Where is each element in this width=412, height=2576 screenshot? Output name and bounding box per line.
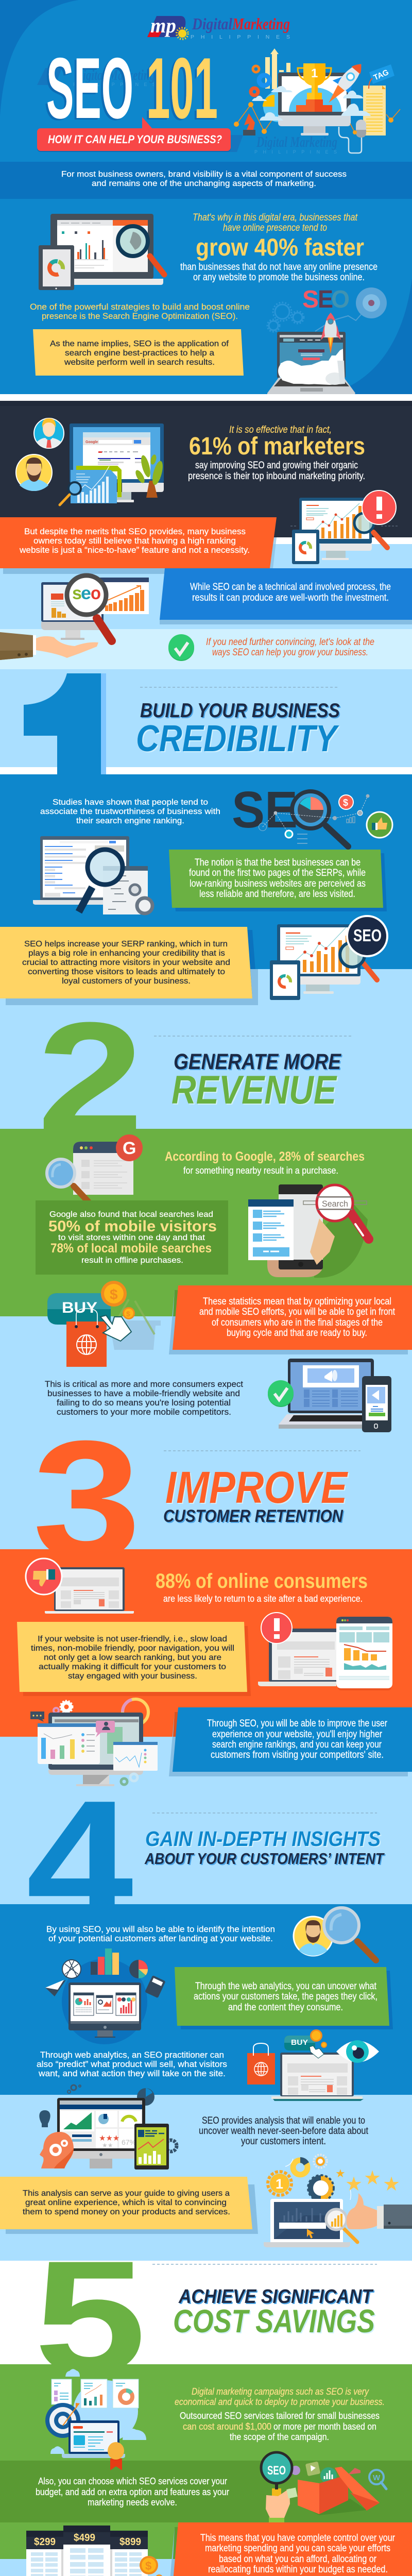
logo: Digital Marketing Philippines: mp — [150, 14, 176, 37]
number 1: 1 — [56, 674, 101, 777]
text block: digital marketing campaigns: economical and quick to deploy to promote your business. — [175, 2397, 385, 2407]
illustration: phone search with hand — [248, 1184, 369, 1278]
illustration: rocket launching from laptop: O — [331, 286, 350, 313]
number 1 — [24, 673, 106, 778]
text block: critical mobile-friendly: customers to your more mobile competitors. — [57, 1407, 231, 1417]
panel: dark green mobile stats: 50% of mobile visitors — [48, 1218, 217, 1235]
illustration: hero monitor with trophy and rocket — [234, 48, 400, 153]
text block: predict: also “predict” what product will sell, what visitors — [37, 2059, 227, 2069]
text block: critical mobile-friendly: failing to do so means you're losing potential — [57, 1398, 231, 1408]
text block: digital marketing campaigns: or more per month based on — [273, 2421, 376, 2432]
illustration: monitor with alert — [290, 490, 398, 564]
illustration: laptop and report card — [258, 1613, 392, 1690]
panel: green notion: found on the first two pages of the SERPs, while — [189, 868, 366, 878]
number 3: 3 — [32, 1406, 141, 1594]
heading: gain in-depth insights — [144, 1813, 385, 1868]
text: 101 — [146, 40, 218, 137]
panel: dark section 61% of marketers — [0, 401, 412, 537]
text block: 61% of marketers: say improving SEO and growing their organic — [195, 460, 358, 471]
illustration: SEO magnifier: SE — [232, 781, 298, 839]
panel: blue technical process: results it can produce are well-worth the investment. — [192, 592, 389, 603]
panel: yellow serp ranking — [0, 927, 258, 1005]
panel: blue through SEO — [169, 1707, 412, 1776]
illustration: pricing tables with coins — [26, 2526, 163, 2576]
illustration: dashboard monitor — [30, 1699, 158, 1786]
panel: yellow serp ranking: loyal customers of your business. — [62, 977, 191, 986]
callout: as the name implies — [33, 329, 244, 376]
icon: blonde avatar — [34, 418, 64, 448]
heading: improve customer retention: IMPROVE — [165, 1463, 349, 1513]
illustration: laptop with tablet and magnifier — [39, 214, 164, 290]
panel: section 2 green — [0, 1129, 412, 1435]
panel: dark green mobile stats: Google also found that local searches lead — [49, 1210, 213, 1219]
text block: grow 40% faster: grow 40% faster — [196, 233, 364, 261]
illustration: hero monitor with trophy and rocket: TAG — [372, 68, 390, 82]
illustration: analytics monitor — [45, 1948, 166, 2044]
panel: light blue background — [0, 537, 412, 767]
text block: SEO provides analysis: uncover wealth never-seen-before data about — [199, 2126, 369, 2137]
text block: predict: Through web analytics, an SEO practitioner can — [40, 2050, 224, 2060]
text block: digital marketing campaigns: can cost around $1,000 — [183, 2421, 271, 2432]
panel: intro band: and remains one of the unchanging aspects of marketing. — [92, 179, 316, 188]
panel: section 4 blue — [0, 1904, 412, 2261]
heading: build your business credibility: CREDIBILITY — [136, 718, 339, 759]
panel: section 3 orange — [0, 1549, 412, 1904]
text block: 88% of online consumers: 88% of online consumers — [156, 1570, 368, 1592]
text block: studies have shown: Studies have shown that people tend to — [53, 798, 208, 807]
callout: further convincing with check — [168, 634, 374, 661]
illustration: dashboard with head and tablet: 67% — [122, 2138, 136, 2146]
text block: grow 40% faster — [180, 212, 377, 283]
heading: improve customer retention — [163, 1451, 360, 1526]
logo: Digital Marketing Philippines — [147, 14, 290, 40]
text block: SEO provides analysis: your customers intent. — [241, 2136, 326, 2147]
illustration: rating gears and thumbs up: 1 — [276, 2176, 283, 2192]
panel: yellow guide: them to spend money on your products and services. — [23, 2208, 230, 2216]
illustration: rocket launching from laptop — [267, 286, 387, 394]
logo: Digital Marketing Philippines: Marketing — [232, 14, 290, 33]
text block: identify the intention — [46, 1924, 275, 1943]
illustration: SEO magnifier: $ — [343, 798, 348, 808]
heading: achieve significant cost savings: ACHIEVE SIGNIFICANT — [178, 2286, 373, 2308]
heading: build your business credibility — [136, 687, 340, 759]
text block: identify the intention: of your potential customers after landing at your website. — [48, 1934, 273, 1943]
text block: studies have shown: associate the trustworthiness of business with — [40, 807, 220, 816]
text block: choose services: budget, and add on extra option and features as your — [36, 2487, 229, 2497]
panel: intro band: For most business owners, brand visibility is a vital component of success — [61, 170, 347, 179]
panel: blue through SEO: customers from visiting your competitors' site. — [211, 1750, 384, 1760]
text block: grow 40% faster: than businesses that do not have any online presence — [180, 262, 377, 273]
watermark logo faint: Digital Marketing — [75, 67, 155, 83]
text block: digital marketing campaigns: Outsourced SEO services tailored for small businesses — [180, 2411, 380, 2421]
illustration: buy button with bag: $ — [110, 1286, 118, 1302]
heading: build your business credibility: BUILD YOUR BUSINESS — [140, 700, 340, 722]
number 5: 5 — [34, 2228, 146, 2408]
heading: generate more revenue: GENERATE MORE — [174, 1049, 341, 1074]
text block: 88% of online consumers — [156, 1570, 368, 1604]
text block: 28% of searches — [165, 1149, 365, 1176]
illustration: dashboard with head and tablet: ★★★ — [99, 2134, 119, 2143]
text block: 28% of searches: According to Google, 28% of searches — [165, 1149, 365, 1164]
panel: hero background — [0, 0, 412, 394]
panel: yellow not user-friendly: times, non-mobile friendly, poor navigation, you will — [31, 1644, 234, 1653]
panel: blue through SEO: experience on your website, you'll enjoy higher — [212, 1729, 383, 1740]
text block: 28% of searches: for something nearby result in a purchase. — [183, 1165, 338, 1176]
illustration: reports, target and laptop — [45, 2369, 146, 2470]
panel: yellow not user-friendly — [17, 1622, 251, 1696]
illustration: G browser with magnifier — [47, 1134, 143, 1201]
panel: orange complete control: based on what you can afford, allocating or — [219, 2554, 377, 2565]
panel: green notion: The notion is that the best businesses can be — [195, 857, 360, 868]
illustration: rocket launching from laptop: E — [318, 286, 333, 313]
panel: green web analytics: and the content they consume. — [228, 2002, 343, 2013]
illustration: hand with seo magnifier: s — [72, 583, 82, 603]
panel: yellow serp ranking: plays a big role in enhancing your credibility that is — [28, 949, 225, 958]
panel: yellow guide: great online experience, which is vital to convincing — [25, 2198, 227, 2207]
text block: 61% of marketers: It is so effective that in fact, — [229, 425, 332, 435]
panel: blue technical process — [160, 568, 412, 624]
panel: dark green mobile stats: to visit stores within one day and that — [58, 1233, 205, 1242]
illustration: gift box of SEO icons: W — [373, 2473, 381, 2482]
heading: generate more revenue: REVENUE — [171, 1067, 337, 1112]
text block: critical mobile-friendly — [45, 1379, 243, 1417]
panel: green notion — [169, 850, 387, 911]
illustration: pricing tables with coins: $499 — [74, 2532, 95, 2544]
illustration: buy button with bag: BUY — [62, 1299, 97, 1316]
illustration: pricing tables with coins: $ — [145, 2560, 151, 2572]
text block: grow 40% faster: have online presence tend to — [223, 223, 327, 233]
heading: gain in-depth insights: GAIN IN-DEPTH INSIGHTS — [145, 1827, 381, 1851]
panel: yellow serp ranking: SEO helps increase your SERP ranking, which in turn — [24, 940, 228, 948]
text block: powerful strategies: One of the powerful strategies to build and boost online — [30, 302, 250, 312]
illustration: rating gears and thumbs up — [264, 2155, 412, 2247]
watermark logo faint — [37, 67, 337, 155]
number 2: 2 — [37, 989, 144, 1167]
text block: 61% of marketers: presence is their top inbound marketing priority. — [188, 471, 365, 482]
callout: further convincing with check: If you need further convincing, let's look at the — [206, 637, 374, 648]
illustration: buy button with bag — [47, 1281, 161, 1367]
panel: orange complete control — [169, 2522, 412, 2576]
callout: as the name implies: website perform well in search results. — [64, 358, 215, 367]
panel: dark green mobile stats — [36, 1200, 228, 1275]
panel: green web analytics — [175, 1967, 393, 2029]
text block: critical mobile-friendly: businesses to have a mobile-friendly website and — [47, 1388, 240, 1398]
panel: yellow not user-friendly: not only get a low search ranking, but you are — [44, 1653, 221, 1662]
illustration: laptop thumbs down — [26, 1558, 134, 1614]
panel: yellow not user-friendly: If your website is not user-friendly, i.e., slow load — [38, 1635, 227, 1643]
illustration: monitor with SEO badge: SEO — [353, 926, 382, 945]
panel: orange these statistics: buying cycle and that are ready to buy. — [227, 1328, 367, 1338]
illustration: rating gears and thumbs up: ★ — [335, 2167, 346, 2180]
text block: powerful strategies: presence is the Search Engine Optimization (SEO). — [42, 311, 238, 321]
text block: grow 40% faster: That's why in this digital era, businesses that — [193, 212, 358, 223]
panel: orange these statistics — [169, 1285, 412, 1354]
text block: studies have shown: their search engine ranking. — [76, 817, 184, 825]
panel: section 1 body — [0, 767, 412, 1129]
panel: light background section 3 — [0, 1435, 412, 1549]
illustration: browser monitor and plant: Google — [85, 440, 98, 444]
panel: orange these statistics: of consumers who are in the final stages of the — [212, 1317, 383, 1328]
text block: grow 40% faster: or any website to promote the business online. — [193, 272, 365, 283]
text block: SEO provides analysis — [199, 2115, 369, 2147]
illustration: G browser with magnifier: G — [123, 1139, 136, 1158]
watermark logo faint: Digital Marketing — [256, 134, 337, 150]
panel: yellow serp ranking: converting those visitors to leads and ultimately to — [28, 968, 225, 976]
text block: identify the intention: By using SEO, you will also be able to identify the intention — [46, 1924, 275, 1934]
heading: generate more revenue — [154, 1036, 351, 1112]
illustration: dashboard with head and tablet: ★★ — [102, 2142, 113, 2149]
illustration: dashboard with head and tablet — [39, 2085, 177, 2170]
text block: choose services: marketing needs evolve. — [88, 2497, 177, 2507]
panel: orange complete control: reallocating funds within your budget as needed. — [208, 2564, 388, 2575]
callout: as the name implies: search engine best-practices to help a — [65, 349, 214, 358]
text block: critical mobile-friendly: This is critical as more and more consumers expect — [45, 1379, 243, 1389]
panel: dark green mobile stats: result in offline purchases. — [81, 1256, 183, 1265]
illustration: rocket launching from laptop: S — [302, 286, 319, 313]
illustration: rating gears and thumbs up: ★ — [345, 2174, 363, 2195]
text block: SEO provides analysis: SEO provides analysis that will enable you to — [202, 2115, 365, 2126]
text block: digital marketing campaigns — [175, 2386, 385, 2442]
number 4: 4 — [26, 1765, 134, 1957]
band: white spacer — [0, 394, 412, 401]
panel: dark green mobile stats: 78% of local mobile searches — [50, 1241, 212, 1256]
text block: powerful strategies — [30, 302, 250, 321]
callout: as the name implies: As the name implies, SEO is the application of — [50, 340, 229, 348]
callout: further convincing with check: ways SEO can help you grow your business. — [212, 647, 368, 658]
panel: green web analytics: actions your customers take, the pages they click, — [194, 1991, 377, 2002]
illustration: hand with seo magnifier: o — [91, 583, 101, 603]
panel: intro band — [0, 162, 412, 199]
illustration: buy button with bag: $ — [126, 1310, 130, 1318]
illustration: phone search with hand: Search — [322, 1199, 348, 1209]
panel: yellow not user-friendly: stay engaged with your business. — [68, 1672, 197, 1681]
panel: orange despite the merits: But despite the merits that SEO provides, many business — [24, 527, 246, 536]
panel: yellow guide: This analysis can serve as your guide to giving users a — [23, 2189, 230, 2198]
logo: Digital Marketing Philippines: PHILIPPINES — [191, 34, 290, 40]
text block: 61% of marketers — [188, 425, 365, 482]
panel: orange despite the merits — [0, 517, 277, 568]
illustration: browser monitor and plant — [60, 423, 165, 505]
text block: choose services: Also, you can choose which SEO services cover your — [38, 2476, 227, 2486]
text block: digital marketing campaigns: Digital marketing campaigns such as SEO is very — [192, 2386, 369, 2397]
panel: yellow not user-friendly: actually making it difficult for your customers to — [39, 1663, 226, 1671]
illustration: laptop and phone megaphone — [268, 1359, 391, 1432]
illustration: gift box of SEO icons — [261, 2452, 386, 2522]
watermark logo faint: PHILIPPINES — [254, 149, 337, 155]
illustration: hand with seo magnifier: e — [81, 583, 91, 603]
illustration: shopping laptop with eye: BUY — [291, 2038, 308, 2047]
illustration: shopping laptop with eye — [247, 2029, 379, 2101]
panel: yellow serp ranking: crucial to attracting more visitors in your website and — [22, 958, 230, 967]
title: SEO 101: SEO — [46, 40, 133, 137]
text block: predict — [37, 2050, 227, 2078]
illustration: hero monitor with trophy and rocket: 1 — [311, 66, 318, 80]
heading: achieve significant cost savings: COST SAVINGS — [173, 2303, 375, 2340]
text block: studies have shown — [40, 798, 220, 825]
section 1 header band — [0, 767, 412, 774]
icon: avatar with magnifier — [294, 1908, 376, 1960]
icon: bearded avatar — [16, 454, 52, 491]
illustration: rating gears and thumbs up: ★ — [383, 2174, 400, 2195]
illustration: search results laptop — [33, 836, 152, 914]
watermark logo faint: PHILIPPINES — [73, 82, 156, 87]
illustration: rating gears and thumbs up: ★ — [364, 2167, 381, 2189]
panel: green notion: low-ranking business websites are perceived as — [190, 878, 366, 889]
illustration: gift box of SEO icons: SEO — [267, 2464, 286, 2478]
panel: orange despite the merits: owners today still believe that having a high ranking — [33, 536, 236, 546]
illustration: monitor with SEO badge — [270, 916, 387, 1000]
text block: digital marketing campaigns: the scope of the campaign. — [230, 2432, 329, 2442]
panel: green web analytics: Through the web analytics, you can uncover what — [195, 1981, 377, 1992]
logo: Digital Marketing Philippines: Digital — [192, 14, 232, 33]
subtitle bubble: how it can help your business — [37, 117, 231, 152]
text block: choose services — [36, 2476, 229, 2507]
text block: 88% of online consumers: are less likely to return to a site after a bad experience. — [163, 1594, 363, 1604]
panel: section 5 green — [0, 2364, 412, 2576]
illustration: pricing tables with coins: $899 — [119, 2536, 141, 2548]
illustration: pricing tables with coins: $299 — [34, 2536, 56, 2548]
heading: achieve significant cost savings — [152, 2264, 377, 2340]
illustration: SEO magnifier — [232, 781, 392, 846]
text block: 61% of marketers: 61% of marketers — [189, 433, 365, 460]
text block: predict: want, and what action they will take on the site. — [38, 2069, 226, 2078]
heading: improve customer retention: CUSTOMER RETENTION — [163, 1506, 344, 1526]
illustration: hand with seo magnifier — [0, 575, 149, 660]
panel: blue through SEO: search engine rankings, and you can keep your — [212, 1739, 382, 1750]
panel: yellow guide — [0, 2177, 258, 2234]
panel: green notion: less reliable and therefore, are less visited. — [199, 889, 355, 900]
panel: orange despite the merits: website is just a “nice-to-have” feature and not a necessity. — [19, 545, 250, 555]
subtitle bubble: how it can help your business: HOW IT CAN HELP YOUR BUSINESS? — [48, 133, 222, 146]
